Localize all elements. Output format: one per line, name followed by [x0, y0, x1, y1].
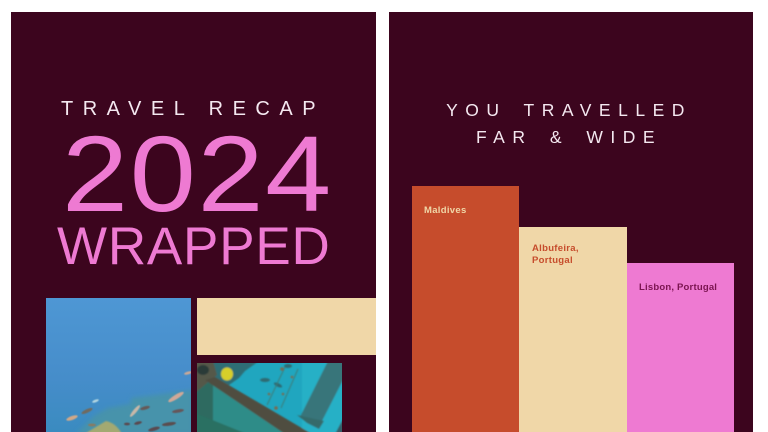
label: Albufeira, Portugal [532, 243, 579, 266]
label: Albufeira, Portugal: Portugal [532, 255, 573, 266]
beige block [197, 298, 376, 355]
bar: Lisbon, Portugal [627, 263, 734, 432]
heading: you travelled far and wide [446, 100, 692, 146]
bar: Maldives [412, 186, 519, 432]
heading: you travelled far and wide: YOU TRAVELLED [446, 100, 692, 120]
label: Lisbon, Portugal: Lisbon, Portugal [639, 282, 717, 293]
label: Maldives: Maldives [424, 205, 467, 216]
panel: travel recap cover [11, 12, 376, 432]
heading: travel recap: TRAVEL RECAP [61, 98, 325, 120]
heading: you travelled far and wide: FAR & WIDE [476, 126, 662, 146]
panel: you travelled far and wide [389, 12, 753, 432]
label: Albufeira, Portugal: Albufeira, [532, 243, 579, 254]
photo: underwater shipwreck [197, 363, 342, 432]
heading: 2024: 2024 [62, 113, 333, 234]
photo: fish above a coral reef [46, 298, 191, 432]
heading: wrapped: WRAPPED [57, 217, 331, 276]
bar: Albufeira, Portugal [519, 227, 627, 432]
